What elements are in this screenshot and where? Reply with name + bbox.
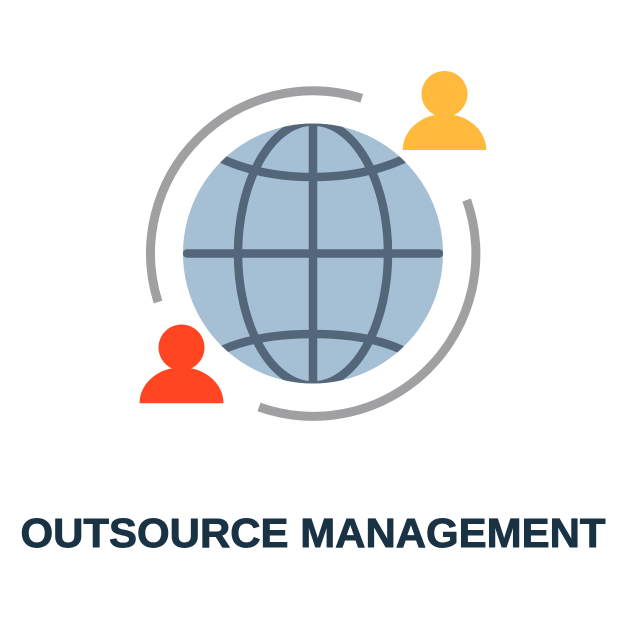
icon: globe: [183, 122, 443, 386]
arc: upper left ring: [151, 91, 362, 302]
title: OUTSOURCE MANAGEMENT: [20, 510, 606, 556]
infographic: [22, 71, 606, 548]
icon: yellow person: [403, 71, 486, 150]
arc: lower right ring: [259, 200, 476, 416]
icon: red person: [140, 324, 224, 403]
